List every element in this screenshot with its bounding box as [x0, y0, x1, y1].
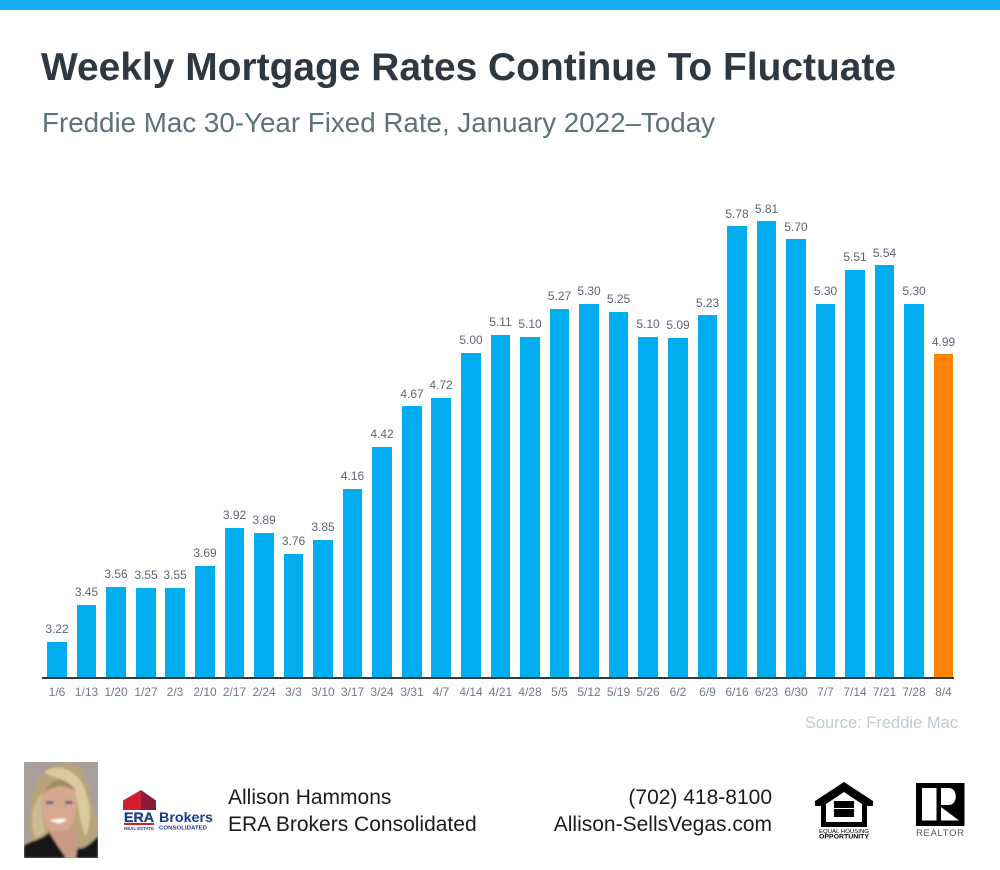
bar 7/7: 7/7: [817, 685, 834, 699]
bar 5/26: 5/26: [636, 685, 660, 699]
bar 2/3: 3.55: [163, 568, 187, 582]
bar 1/20: 3.56: [104, 567, 128, 581]
source note: Source: Freddie Mac: [805, 714, 958, 732]
bar 6/2: 5.09: [666, 318, 690, 332]
bar 3/17: 3/17: [341, 685, 365, 699]
bar 1/13: [75, 585, 99, 699]
bar 7/28: 5.30: [902, 284, 926, 298]
bar 1/20: [104, 567, 128, 699]
bar 3/24: 4.42: [370, 427, 394, 441]
bar 3/3: 3/3: [285, 685, 302, 699]
bar 4/14: 5.00: [459, 333, 483, 347]
bar 3/24: [370, 427, 394, 699]
bar 5/26: [636, 317, 660, 699]
bar 6/16: 6/16: [725, 685, 749, 699]
bar 6/9: 6/9: [699, 685, 716, 699]
icon: equal housing opportunity: EQUAL HOUSING: [819, 829, 869, 835]
bar 2/10: 2/10: [193, 685, 217, 699]
bar 7/14: 7/14: [843, 685, 867, 699]
bar 5/12: 5/12: [577, 685, 601, 699]
bar 2/10: [193, 546, 217, 699]
bar 4/7: [429, 378, 453, 699]
bar 7/21: [873, 246, 897, 699]
bar 4/21: 5.11: [489, 315, 512, 329]
contact details: (702) 418-8100: [628, 786, 772, 809]
logo wordmark ERA: ERA: [124, 809, 154, 825]
bar 4/21: [489, 315, 513, 699]
bar 7/14: [843, 250, 867, 699]
bar 1/20: 1/20: [104, 685, 128, 699]
bar 4/28: [518, 317, 542, 699]
highlighted bar 8/4: [932, 335, 956, 699]
bar 6/9: 5.23: [696, 296, 720, 310]
bar 3/10: 3.85: [311, 520, 335, 534]
bar 6/30: 6/30: [784, 685, 808, 699]
bar 1/6: 1/6: [49, 685, 66, 699]
agent name and company: [228, 786, 477, 836]
bar 2/17: 2/17: [223, 685, 247, 699]
bar 3/17: [341, 469, 365, 699]
bar 7/21: 5.54: [873, 246, 897, 260]
agent name and company: Allison Hammons: [228, 786, 391, 809]
bar 6/23: [755, 202, 779, 699]
bar 5/5: [548, 289, 572, 699]
bar 4/7: 4.72: [429, 378, 453, 392]
bar 2/17: 3.92: [223, 508, 247, 522]
chart baseline: [42, 677, 954, 679]
bar 5/12: 5.30: [577, 284, 601, 298]
bar 5/5: 5/5: [551, 685, 568, 699]
bar 7/14: 5.51: [843, 250, 867, 264]
highlighted bar 8/4: 4.99: [932, 335, 956, 349]
bar 6/30: 5.70: [784, 220, 808, 234]
bar 4/14: 4/14: [459, 685, 483, 699]
bar chart: [45, 202, 956, 699]
bar 5/26: 5.10: [636, 317, 660, 331]
bar 2/3: 2/3: [167, 685, 184, 699]
bar 6/2: [666, 318, 690, 699]
bar 6/9: [696, 296, 720, 699]
icon: equal housing opportunity: OPPORTUNITY: [819, 834, 870, 841]
agent name and company: ERA Brokers Consolidated: [228, 813, 477, 836]
ERA Brokers logo: [123, 790, 213, 832]
bar 6/23: 6/23: [755, 685, 779, 699]
bar 3/10: [311, 520, 335, 699]
bar 3/31: 4.67: [400, 387, 424, 401]
bar 2/10: 3.69: [193, 546, 217, 560]
bar 6/2: 6/2: [670, 685, 687, 699]
subtitle: Freddie Mac 30-Year Fixed Rate, January 2022–Today: [42, 107, 715, 138]
bar 4/21: 4/21: [489, 685, 513, 699]
bar 5/19: 5.25: [607, 292, 631, 306]
top accent band: [0, 0, 1000, 10]
bar 3/3: 3.76: [282, 534, 306, 548]
bar 7/28: 7/28: [902, 685, 926, 699]
bar 3/31: 3/31: [400, 685, 424, 699]
bar 2/24: 2/24: [252, 685, 276, 699]
bar 1/27: 1/27: [134, 685, 158, 699]
icon: equal housing opportunity: [815, 782, 873, 841]
bar 7/7: [814, 284, 838, 699]
icon: realtor: [916, 783, 964, 839]
bar 2/17: [223, 508, 247, 699]
bar 5/19: [607, 292, 631, 699]
bar 3/31: [400, 387, 424, 699]
bar 2/3: [163, 568, 187, 699]
logo wordmark consolidated: CONSOLIDATED: [159, 826, 207, 832]
bar 5/12: [577, 284, 601, 699]
bar 1/13: 3.45: [75, 585, 99, 599]
bar 7/7: 5.30: [814, 284, 838, 298]
contact details: [554, 786, 772, 836]
agent portrait: [24, 762, 98, 858]
bar 6/16: 5.78: [725, 207, 749, 221]
logo wordmark Brokers: Brokers: [159, 809, 213, 825]
bar 3/10: 3/10: [311, 685, 335, 699]
bar 3/3: [282, 534, 306, 699]
bar 5/5: 5.27: [548, 289, 572, 303]
bar 1/27: [134, 568, 158, 699]
bar 4/28: 5.10: [518, 317, 542, 331]
bar 1/6: [45, 622, 69, 699]
bar 2/24: [252, 513, 276, 699]
logo roof: [123, 790, 156, 810]
logo underline: [124, 823, 154, 825]
bar 2/24: 3.89: [252, 513, 276, 527]
bar 7/21: 7/21: [873, 685, 897, 699]
bar 5/19: 5/19: [607, 685, 631, 699]
bar 1/27: 3.55: [134, 568, 158, 582]
contact details: Allison-SellsVegas.com: [554, 813, 772, 836]
bar 1/13: 1/13: [75, 685, 99, 699]
bar 3/17: 4.16: [341, 469, 365, 483]
bar 6/16: [725, 207, 749, 699]
bar 6/30: [784, 220, 808, 699]
bar 3/24: 3/24: [370, 685, 394, 699]
bar 4/28: 4/28: [518, 685, 542, 699]
logo tagline real estate: REAL ESTATE: [124, 826, 154, 831]
bar 7/28: [902, 284, 926, 699]
icon: realtor: REALTOR: [916, 828, 964, 839]
bar 6/23: 5.81: [755, 202, 779, 216]
highlighted bar 8/4: 8/4: [935, 685, 952, 699]
title: Weekly Mortgage Rates Continue To Fluctuate: [41, 46, 896, 89]
bar 1/6: 3.22: [45, 622, 69, 636]
bar 4/7: 4/7: [433, 685, 450, 699]
bar 4/14: [459, 333, 483, 699]
